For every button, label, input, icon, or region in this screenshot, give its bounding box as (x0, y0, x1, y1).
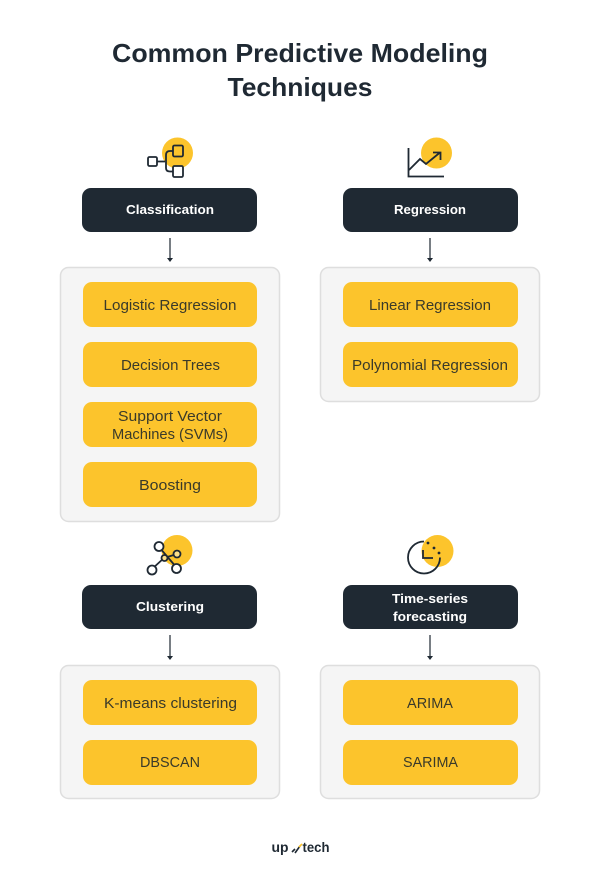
panel: Classification techniques (60, 268, 280, 522)
item: Logistic Regression (83, 282, 257, 327)
panel: Clustering techniques (60, 666, 280, 798)
heading: Regression (343, 188, 518, 232)
heading: Time-series forecasting: Time-series (392, 591, 468, 606)
arrow: Regression to panel (427, 238, 433, 262)
heading: Classification (82, 188, 257, 232)
item: Polynomial Regression: Polynomial Regression (352, 358, 508, 374)
item: Boosting (83, 462, 257, 507)
item: Decision Trees: Decision Trees (121, 358, 220, 374)
item: Linear Regression (343, 282, 518, 327)
arrow: Time-series to panel (427, 635, 433, 660)
logo: uptech (272, 839, 330, 855)
item: SARIMA: SARIMA (403, 755, 458, 771)
item: Decision Trees (83, 342, 257, 387)
logo: uptech: up (272, 839, 288, 855)
icon: regression chart (408, 138, 452, 176)
title: Techniques (228, 72, 372, 102)
heading: Time-series forecasting: forecasting (393, 609, 467, 624)
title (112, 38, 488, 102)
item: K-means clustering (83, 680, 257, 725)
item: Polynomial Regression (343, 342, 518, 387)
icon: clustering network (148, 535, 192, 574)
item: Logistic Regression: Logistic Regression (104, 298, 236, 314)
item: DBSCAN: DBSCAN (140, 755, 200, 771)
item: ARIMA: ARIMA (407, 696, 453, 712)
heading: Clustering (82, 585, 257, 629)
heading: Classification: Classification (126, 202, 214, 217)
panel: Time-series techniques (320, 666, 540, 798)
item: Support Vector Machines (83, 402, 257, 447)
item: Support Vector Machines: Machines (SVMs) (112, 427, 228, 443)
logo: uptech: tech (302, 839, 330, 855)
item: Linear Regression: Linear Regression (369, 298, 491, 314)
icon: time-series clock (408, 535, 454, 574)
item: Support Vector Machines: Support Vector (118, 409, 222, 425)
icon: classification hierarchy (148, 138, 193, 177)
heading: Time-series forecasting (343, 585, 518, 629)
item: SARIMA (343, 740, 518, 785)
item: ARIMA (343, 680, 518, 725)
arrow: Classification to panel (167, 238, 173, 262)
heading: Clustering: Clustering (136, 599, 204, 614)
item: Boosting: Boosting (139, 478, 201, 494)
title: Common Predictive Modeling (112, 38, 488, 68)
item: DBSCAN (83, 740, 257, 785)
item: K-means clustering: K-means clustering (104, 696, 237, 712)
panel: Regression techniques (320, 268, 540, 402)
heading: Regression: Regression (394, 202, 466, 217)
arrow: Clustering to panel (167, 635, 173, 660)
